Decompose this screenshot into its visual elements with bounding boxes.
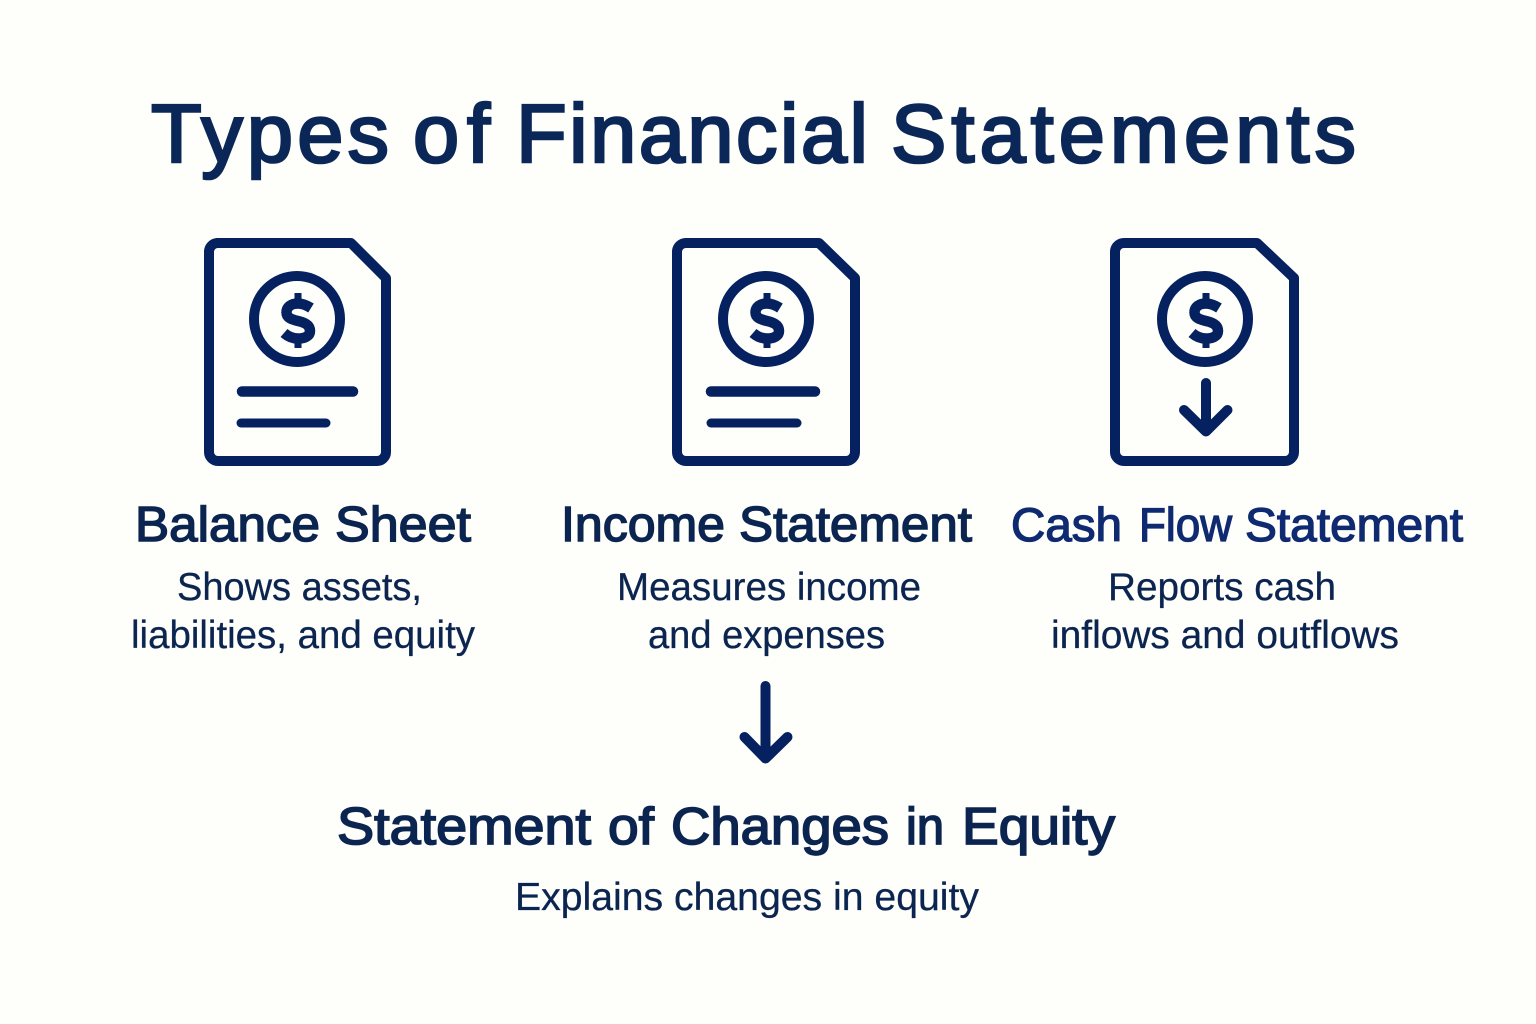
text: cash flow description bbox=[1051, 566, 1399, 657]
heading: statement of changes in equity: Statement bbox=[337, 798, 592, 856]
panel: balance sheet bbox=[131, 243, 475, 657]
heading: statement of changes in equity: in bbox=[906, 798, 944, 856]
heading: cash flow statement: Statement bbox=[1245, 498, 1463, 551]
text: income statement description bbox=[617, 566, 921, 657]
heading: statement of changes in equity: of bbox=[608, 798, 655, 856]
heading: income statement: Statement bbox=[739, 498, 972, 552]
arrow: income statement to changes in equity bbox=[744, 686, 788, 758]
text: cash flow description: inflows and outflows bbox=[1051, 614, 1399, 657]
heading: balance sheet: Balance bbox=[135, 498, 320, 552]
title: of bbox=[413, 87, 491, 180]
text: balance sheet description bbox=[131, 566, 475, 657]
heading: cash flow statement: Flow bbox=[1139, 498, 1233, 551]
panel: statement of changes in equity bbox=[337, 798, 1115, 919]
heading: balance sheet bbox=[135, 498, 471, 552]
heading: statement of changes in equity: Changes bbox=[671, 798, 889, 856]
heading: income statement bbox=[561, 498, 972, 552]
title: Financial bbox=[516, 87, 868, 180]
panel: income statement bbox=[561, 243, 972, 657]
text: cash flow description: Reports cash bbox=[1108, 566, 1336, 609]
icon: income statement document bbox=[677, 243, 855, 461]
panel: cash flow statement bbox=[1011, 243, 1463, 657]
title bbox=[151, 87, 1356, 180]
heading: income statement: Income bbox=[561, 498, 725, 552]
title: Types bbox=[151, 87, 389, 180]
icon: balance sheet document bbox=[209, 243, 386, 461]
heading: statement of changes in equity bbox=[337, 798, 1115, 856]
text: balance sheet description: liabilities, and equity bbox=[131, 614, 475, 657]
text: equity description: Explains changes in equity bbox=[515, 876, 979, 919]
heading: cash flow statement: Cash bbox=[1011, 498, 1122, 551]
heading: balance sheet: Sheet bbox=[335, 498, 471, 552]
title: Statements bbox=[891, 87, 1356, 180]
heading: statement of changes in equity: Equity bbox=[962, 798, 1115, 856]
heading: cash flow statement bbox=[1011, 498, 1463, 551]
text: income statement description: Measures income bbox=[617, 566, 921, 609]
icon: cash flow document with down arrow bbox=[1115, 243, 1294, 461]
text: income statement description: and expenses bbox=[648, 614, 885, 657]
text: balance sheet description: Shows assets, bbox=[177, 566, 422, 609]
